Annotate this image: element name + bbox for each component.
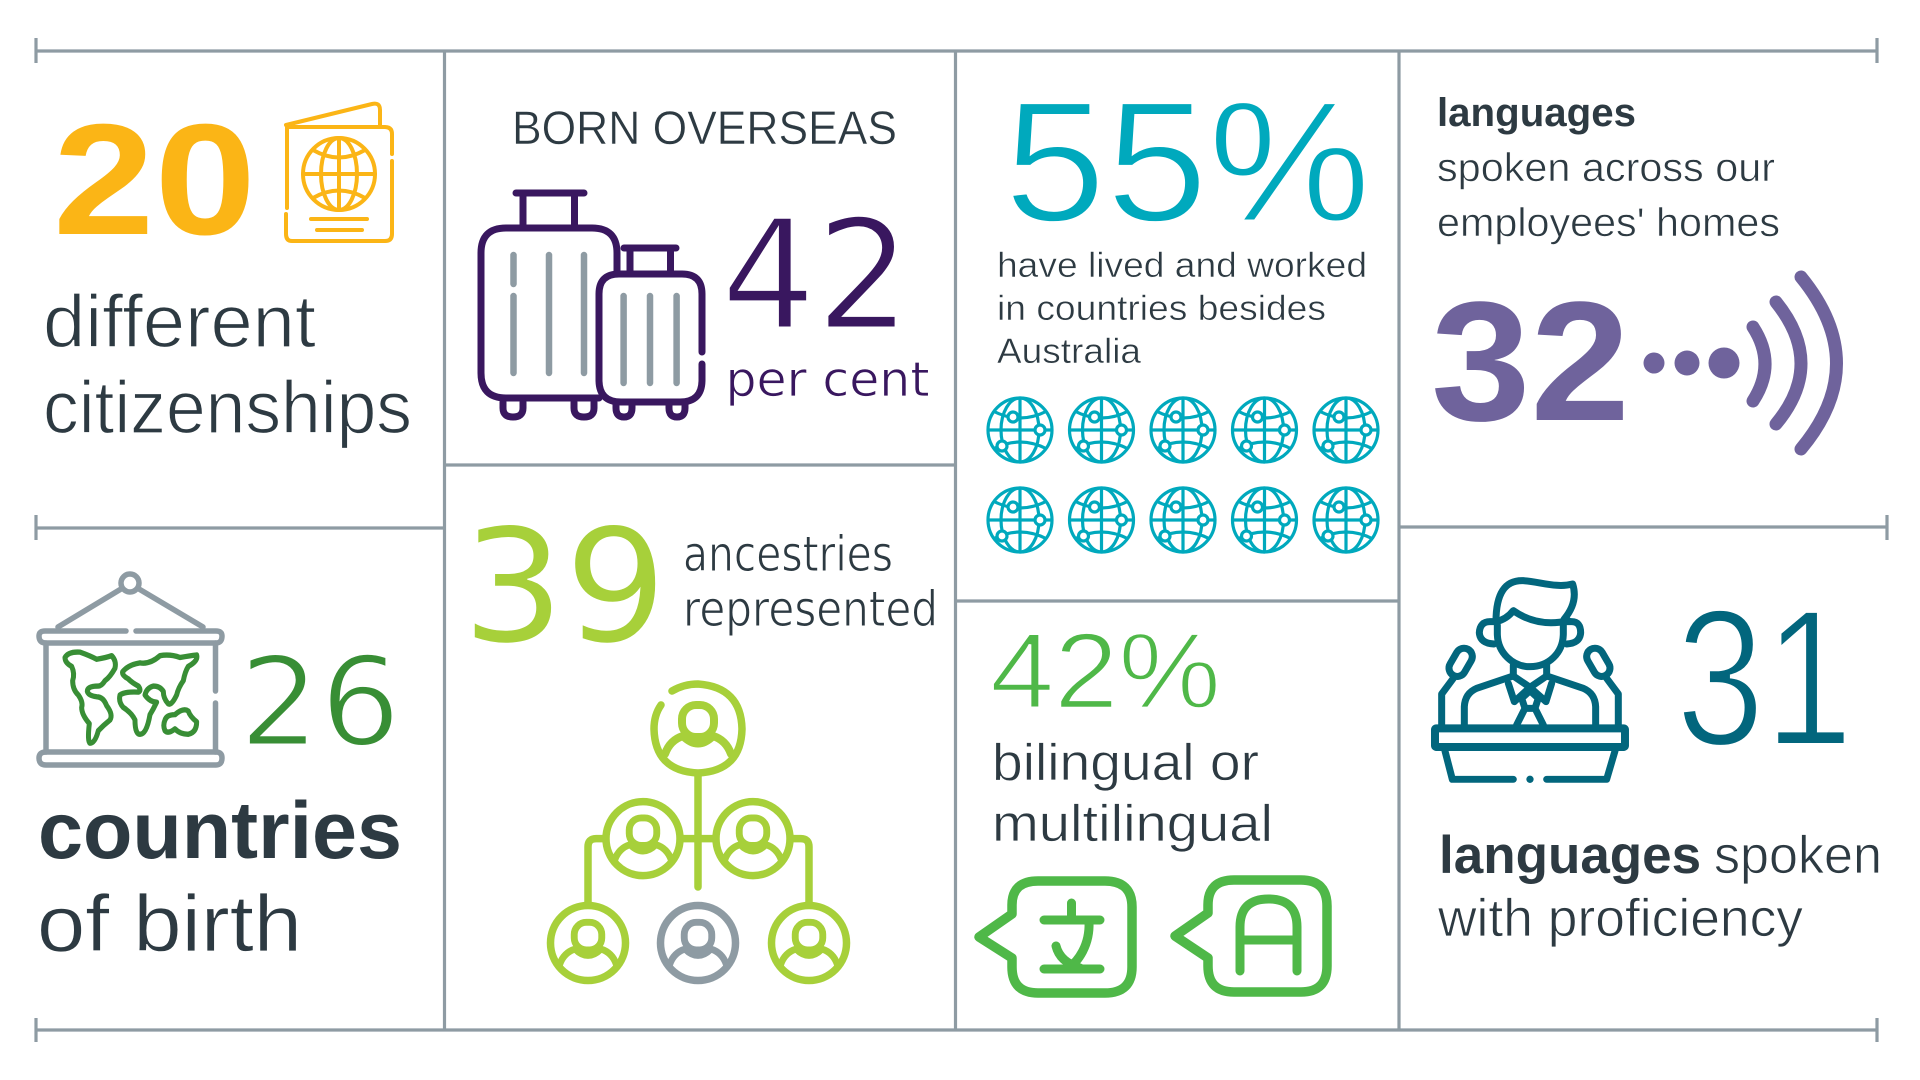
icon: suitcases <box>481 193 702 417</box>
stat: 55%: 55% <box>1004 66 1371 258</box>
panel: born overseas <box>445 51 955 465</box>
panel: bilingual <box>956 602 1399 1030</box>
text: have lived and worked: have lived and worked <box>997 246 1367 285</box>
text: different citizenships <box>43 280 412 449</box>
text: languages spoken with proficiency: languages <box>1439 826 1701 885</box>
stat: 42: 42 <box>721 187 911 364</box>
text: languages spoken with proficiency: spoken <box>1714 826 1882 885</box>
panel: citizenships <box>36 51 444 528</box>
text: ancestries represented <box>683 526 938 638</box>
icon: ten globes <box>988 398 1378 552</box>
text: bilingual or multilingual: bilingual or <box>992 734 1259 792</box>
text: different citizenships: citizenships <box>43 366 412 449</box>
text: bilingual or multilingual <box>992 734 1273 853</box>
panel: languages spoken with proficiency <box>1400 528 1887 1030</box>
panel: lived and worked overseas <box>956 51 1399 601</box>
text: different citizenships: different <box>43 280 316 363</box>
text: languages spoken across our employees' homes <box>1437 91 1780 245</box>
text: languages spoken with proficiency: with proficiency <box>1437 889 1803 948</box>
text: ancestries represented: ancestries <box>683 526 893 583</box>
stat: 26: 26 <box>239 632 401 775</box>
text: languages spoken across our employees' homes: spoken across our <box>1437 146 1775 190</box>
text: have lived and worked: Australia <box>997 332 1142 371</box>
text: have lived and worked: in countries besides <box>997 289 1326 328</box>
stat: 39: 39 <box>462 496 667 679</box>
icon: signal waves <box>1644 277 1836 449</box>
icon: translation bubbles <box>979 880 1327 993</box>
panel: ancestries <box>445 466 955 1030</box>
text: ancestries represented: represented <box>683 581 938 638</box>
icon: passport <box>286 104 392 241</box>
text: have lived and worked <box>997 246 1367 371</box>
text: countries of birth <box>37 786 402 968</box>
panel: countries of birth <box>36 529 444 1030</box>
text: languages spoken with proficiency <box>1437 826 1882 948</box>
text: languages spoken across our employees' homes: employees' homes <box>1437 201 1780 245</box>
icon: speaker at podium <box>1435 581 1625 783</box>
panel: languages at home <box>1400 51 1877 527</box>
stat: 32: 32 <box>1431 267 1630 457</box>
stat: 31: 31 <box>1676 569 1853 787</box>
text: languages spoken across our employees' homes: languages <box>1437 91 1636 135</box>
stat: 42%: 42% <box>990 610 1221 731</box>
text: countries of birth: of birth <box>37 879 302 968</box>
stat: 20: 20 <box>53 92 256 268</box>
icon: family tree <box>550 684 846 980</box>
text: bilingual or multilingual: multilingual <box>992 795 1273 853</box>
icon: wall map <box>39 574 222 765</box>
text: per cent: per cent <box>726 352 930 408</box>
heading: born overseas: BORN OVERSEAS <box>512 101 897 154</box>
text: countries of birth: countries <box>38 786 402 876</box>
